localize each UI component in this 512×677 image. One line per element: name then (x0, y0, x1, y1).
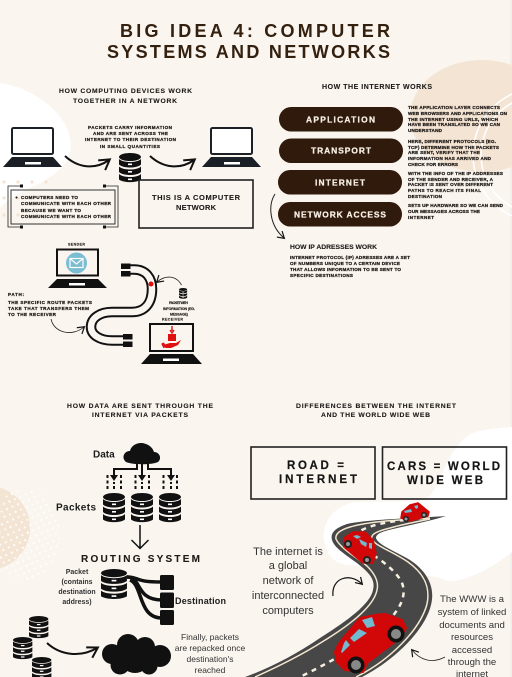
arrow: internet text to road (333, 578, 362, 596)
icon: routing database (101, 569, 127, 599)
label: destination: Destination (175, 596, 226, 606)
text: application description: WEB BROWSERS AND APPLICATIONS ON (408, 111, 508, 116)
arrow: to routing system (132, 525, 148, 548)
heading: INTERNET VIA PACKETS (92, 412, 188, 419)
layer: application (279, 107, 403, 132)
text: application description: THE INTERNET USING URLS, WHICH (408, 117, 499, 122)
text: path explanation: THE SPECIFIC ROUTE PACKETS (8, 300, 92, 305)
diagram: cable (91, 264, 152, 347)
icon: receiver laptop (202, 128, 261, 167)
text: WWW definition (438, 594, 506, 677)
icon: top car (401, 503, 429, 522)
text: transport description (408, 139, 499, 167)
arrow: WWW text to car (412, 650, 445, 661)
callout: this is a computer network: THIS IS A COMPUTER (152, 193, 241, 202)
panel: how computing devices work (3, 88, 261, 228)
panel: how the internet works (271, 84, 508, 278)
text: path explanation: TAKE THAT TRANSFERS THEM (8, 306, 89, 311)
text: WWW definition: The WWW is a (440, 594, 505, 605)
callout: this is a computer network: NETWORK (176, 203, 217, 212)
arrow: laptop to database (65, 156, 109, 166)
text: how IP addresses work: HOW IP ADRESSES WORK (290, 244, 377, 251)
text: the internet definition (252, 546, 324, 617)
callout: road equals internet: INTERNET (279, 474, 357, 486)
text: application description: THE APPLICATION LAYER CONNECTS (408, 105, 500, 110)
text: packet with information (163, 301, 195, 316)
arrow: database to laptop (150, 156, 194, 166)
text: transport description: CHECK FOR ERRORS (408, 162, 458, 167)
heading (67, 403, 213, 419)
callout: why computers communicate: COMMUNICATE WITH EACH OTHER (21, 214, 112, 219)
text: network access description (408, 203, 504, 220)
icon: middle car (344, 532, 376, 564)
text: packets repacked: destination's (186, 654, 234, 664)
icon: cloud (123, 443, 160, 464)
text: packets repacked: reached (195, 665, 226, 675)
text: packets repacked: Finally, packets (181, 632, 239, 642)
decoration: peach dots (2, 180, 48, 217)
icon: large car (335, 614, 406, 674)
arrow: databases to cloud (47, 643, 97, 654)
text: transport description: TCP) DETERMINE HOW THE PACKETS (408, 145, 499, 150)
diagram: routing tree (127, 577, 162, 618)
text: packets repacked (175, 632, 245, 675)
icon: small packet database (179, 288, 187, 299)
marker: packet on cable (148, 282, 154, 286)
icon: large cloud (102, 634, 171, 674)
text: application description: UNDERSTAND (408, 128, 443, 133)
icon: sender laptop with mail (48, 250, 107, 288)
text: path explanation: PATH: (8, 292, 24, 297)
icon: database (119, 153, 141, 182)
text: path explanation (8, 292, 92, 317)
panel: internet vs world wide web (245, 403, 506, 677)
icon: packet databases (103, 493, 181, 522)
text: packet contains destination address: address) (62, 599, 92, 606)
text: internet description: PACKET IS SENT OVER DIFFERENT (408, 182, 493, 187)
layer: network access: NETWORK ACCESS (294, 210, 386, 220)
arrow: packet to cable (157, 277, 182, 285)
callout: why computers communicate: COMPUTERS NEED TO (21, 195, 78, 200)
text: packets repacked: are repacked once (175, 643, 245, 653)
callout: why computers communicate: BECAUSE WE WANT TO (21, 208, 81, 213)
layer: application: APPLICATION (306, 114, 375, 124)
layer: transport (279, 138, 403, 163)
text: packets: PACKETS CARRY INFORMATION (88, 125, 173, 130)
text: internet description: PATHS TO REACH ITS FINAL (408, 188, 481, 193)
icon: sender laptop (3, 128, 62, 167)
text: packets (85, 125, 177, 149)
callout: road equals internet (251, 447, 375, 499)
layer: internet: INTERNET (315, 178, 366, 188)
decoration: top-left white blob (0, 83, 71, 208)
decoration: dotted texture (0, 490, 62, 582)
text: packet with information: INFORMATION (EG. (163, 307, 195, 311)
heading: HOW COMPUTING DEVICES WORK (59, 88, 192, 95)
text: transport description: INFORMATION HAS ARRIVED AND (408, 156, 492, 161)
label: sender: SENDER (68, 242, 85, 246)
text: internet description (408, 171, 503, 199)
callout: why computers communicate (8, 184, 118, 228)
text: packets: IN SMALL QUANTITIES (100, 144, 160, 149)
text: WWW definition: through the (448, 657, 496, 668)
heading: AND THE WORLD WIDE WEB (321, 412, 430, 419)
heading: routing system: ROUTING SYSTEM (81, 554, 200, 565)
text: packet with information: MESSAGE) (170, 312, 189, 316)
text: application description: HAVE BEEN TRANSLATED SO WE CAN (408, 122, 501, 127)
callout: why computers communicate: COMMUNICATE WITH EACH OTHER (21, 201, 112, 206)
heading (59, 88, 192, 105)
heading (296, 403, 457, 419)
text: packets: INTERNET TO THEIR DESTINATION (85, 137, 177, 142)
text: packet contains destination address: (contains (61, 579, 93, 586)
text: packet contains destination address: Packet (66, 569, 89, 576)
text: WWW definition: documents and (439, 620, 505, 631)
arrow: to IP addresses (271, 194, 284, 238)
title (107, 21, 390, 62)
diagram: distribution arrows (110, 458, 175, 481)
layer: network access (278, 202, 402, 226)
callout: cars equals world wide web: CARS = WORLD (387, 461, 500, 473)
panel: how data are sent (13, 403, 245, 677)
label: receiver: RECEIVER (162, 318, 183, 322)
text: how IP addresses work: OF NUMBERS UNIQUE TO A CERTAIN DEVICE (290, 261, 400, 266)
heading: HOW THE INTERNET WORKS (322, 84, 432, 91)
text: packet with information: PACKET WITH (169, 301, 188, 305)
text: the internet definition: network of (263, 575, 314, 587)
layer: transport: TRANSPORT (311, 146, 372, 156)
title: BIG IDEA 4: COMPUTER (120, 21, 390, 41)
heading: TOGETHER IN A NETWORK (73, 98, 177, 105)
icon: destination nodes (160, 575, 174, 625)
text: WWW definition: accessed (452, 645, 492, 656)
callout: cars equals world wide web (382, 447, 506, 499)
text: transport description: HERE, DIFFERENT PROTOCOLS (EG. (408, 139, 496, 144)
decoration: white blob behind road (324, 427, 512, 581)
text: how IP addresses work: INTERNET PROTOCOL (IP) ADRESSES ARE A SET (290, 255, 410, 260)
arrow: path to cable (51, 319, 84, 333)
label: data: Data (93, 450, 115, 460)
text: WWW definition: resources (451, 632, 493, 643)
decoration: top-right peach blob (410, 60, 512, 172)
text: transport description: ARE SENT, VERIFY THAT THE (408, 150, 480, 155)
title: SYSTEMS AND NETWORKS (107, 42, 390, 62)
illustration: road (245, 516, 446, 677)
text: how IP addresses work: SPECIFIC DESTINATIONS (290, 273, 353, 278)
callout: road equals internet: ROAD = (287, 460, 344, 472)
text: network access description: OUR MESSAGES ACROSS THE (408, 209, 480, 214)
icon: scattered databases (13, 616, 51, 677)
text: packet contains destination address: destination (58, 589, 96, 596)
text: packets: AND ARE SENT ACROSS THE (93, 131, 168, 136)
panel: packet path diagram (8, 242, 202, 364)
text: packet contains destination address (58, 569, 96, 606)
callout: this is a computer network (139, 180, 253, 228)
icon: receiver laptop with package (141, 324, 202, 364)
callout: cars equals world wide web: WIDE WEB (407, 475, 483, 487)
text: application description (408, 105, 508, 133)
decoration: lower-left peach circle (0, 486, 30, 570)
text: internet description: DESTINATION (408, 194, 443, 199)
decoration: white rings (473, 88, 512, 222)
text: internet description: WITH THE INFO OF THE IP ADDRESSES (408, 171, 503, 176)
text: WWW definition: system of linked (438, 607, 506, 618)
layer: internet (278, 170, 402, 194)
text: internet description: OF THE SENDER AND RECEIVER, A (408, 177, 494, 182)
text: how IP addresses work (290, 244, 410, 278)
label: packets: Packets (56, 502, 96, 514)
text: network access description: INTERNET (408, 215, 434, 220)
heading: HOW DATA ARE SENT THROUGH THE (67, 403, 213, 410)
text: the internet definition: The internet is (253, 546, 323, 558)
text: path explanation: TO THE RECEIVER (8, 312, 57, 317)
text: how IP addresses work: THAT ALLOWS INFORMATION TO BE SENT TO (290, 267, 401, 272)
text: the internet definition: a global (269, 560, 307, 572)
diagram: packet dots (106, 475, 178, 489)
text: network access description: SETS UP HARDWARE SO WE CAN SEND (408, 203, 504, 208)
heading: DIFFERENCES BETWEEN THE INTERNET (296, 403, 457, 410)
text: the internet definition: computers (262, 605, 314, 617)
text: the internet definition: interconnected (252, 590, 324, 602)
